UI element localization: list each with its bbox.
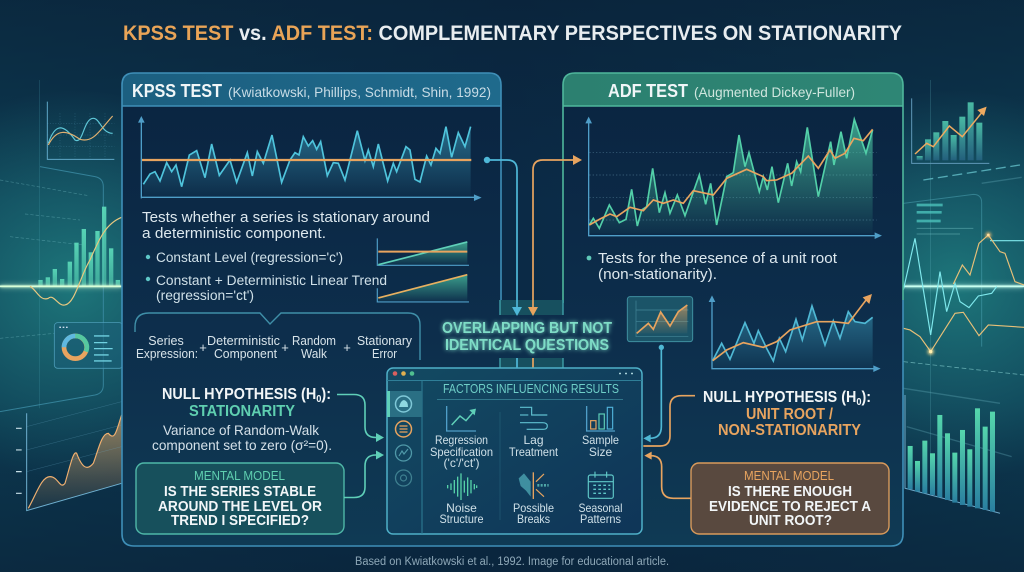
chart: bottom left area chart [16, 402, 122, 511]
ADF header [563, 73, 903, 106]
arrow: ADF mini chart to factors [643, 345, 664, 442]
KPSS mental model box [136, 463, 344, 534]
ADF description: (non-stationarity). [598, 267, 717, 283]
series expression formula: Walk [301, 347, 328, 361]
overlap heading: OVERLAPPING BUT NOT [442, 320, 612, 337]
factor: seasonal patterns: Patterns [580, 512, 621, 526]
panel: factors influencing results [387, 368, 642, 534]
ADF mental model box [691, 463, 889, 534]
right side decorative data charts [903, 80, 1024, 513]
series expression formula: Expression: [136, 347, 198, 361]
line: right orange lines [903, 232, 1024, 355]
connector: KPSS to centre [484, 157, 522, 368]
curve: left orange curve [30, 217, 122, 305]
chart: left bar chart [38, 207, 120, 286]
chart: top left line chart [47, 102, 114, 159]
factor: seasonal patterns [578, 472, 622, 526]
KPSS bullet list: (regression='ct') [156, 288, 254, 303]
series expression formula: Stationary [357, 334, 413, 348]
panel: ADF test [122, 73, 903, 546]
chart: top right bars with arrow [912, 98, 989, 163]
KPSS header: KPSS TEST [132, 81, 222, 101]
glowing baseline right [903, 285, 1024, 287]
KPSS null hypothesis: Variance of Random-Walk [163, 422, 320, 438]
KPSS description: a deterministic component. [142, 225, 326, 242]
ADF mental model box: EVIDENCE TO REJECT A [709, 499, 871, 515]
ADF mini icon chart [627, 297, 693, 342]
factor: regression specification [430, 406, 493, 470]
arrow: ADF null hypothesis to factors [643, 396, 695, 446]
KPSS description: Tests whether a series is stationary around [142, 209, 430, 226]
factor: regression specification: Regression [435, 433, 488, 447]
ADF null hypothesis: 0 [856, 397, 862, 408]
KPSS mental model box: TREND I SPECIFIED? [171, 513, 309, 529]
connector: ADF to centre [528, 155, 582, 368]
ADF description [587, 251, 837, 283]
factor: possible breaks: Possible [513, 501, 554, 515]
KPSS null hypothesis [152, 386, 332, 453]
ADF null hypothesis: NULL HYPOTHESIS (H [703, 389, 869, 406]
KPSS mental model box: AROUND THE LEVEL OR [158, 499, 322, 515]
factor: seasonal patterns: Seasonal [578, 501, 622, 515]
factor: lag treatment: Treatment [509, 445, 559, 459]
left side decorative data charts [0, 80, 123, 511]
ADF header: (Augmented Dickey-Fuller) [694, 84, 855, 100]
ADF mental model box: IS THERE ENOUGH [728, 484, 852, 500]
KPSS header [122, 73, 501, 106]
ADF mental model box: UNIT ROOT? [749, 513, 832, 529]
footer note: Based on Kwiatkowski et al., 1992. Image for educational article. [355, 556, 669, 568]
KPSS description [142, 209, 430, 242]
overlap heading [442, 320, 612, 354]
ADF null hypothesis: ): [861, 389, 871, 406]
main frame [122, 73, 903, 546]
mini chart: constant level [377, 238, 469, 265]
ADF secondary line chart [709, 294, 881, 372]
series expression formula: + [343, 340, 351, 355]
factor: regression specification: ('c'/'ct') [444, 456, 480, 470]
KPSS header: (Kwiatkowski, Phillips, Schmidt, Shin, 1992) [228, 84, 491, 100]
factor: possible breaks [513, 472, 554, 526]
KPSS null hypothesis: component set to zero (σ²=0). [152, 437, 332, 453]
series expression formula [135, 313, 420, 361]
panel: KPSS test [122, 73, 501, 534]
window controls [393, 371, 633, 376]
factor: sample size: Sample [582, 433, 619, 447]
panel: overlapping questions [442, 155, 612, 368]
factor: possible breaks: Breaks [517, 512, 550, 526]
series expression formula: Error [372, 347, 397, 361]
series expression formula: Random [292, 334, 336, 348]
KPSS mental model box: MENTAL MODEL [194, 468, 285, 483]
glowing baseline left [0, 285, 122, 287]
ADF line chart [585, 117, 882, 239]
factor: lag treatment [509, 407, 559, 459]
widget: donut chart card [54, 323, 123, 368]
title: KPSS TEST vs. ADF TEST: COMPLEMENTARY PERSPECTIVES ON STATIONARITY [123, 22, 902, 45]
KPSS null hypothesis: 0 [316, 394, 322, 405]
KPSS bullet list: Constant Level (regression='c') [156, 250, 343, 265]
sidebar icons [387, 391, 422, 486]
arrow: ADF mental model to factors [644, 452, 691, 498]
series expression formula: + [281, 340, 289, 355]
arrow: KPSS null hypothesis to factors [337, 394, 384, 442]
factor: regression specification: Specification [430, 445, 493, 459]
arrow: KPSS mental model to factors [344, 450, 384, 498]
series expression formula: Component [214, 347, 278, 361]
factor: lag treatment: Lag [523, 433, 544, 447]
series expression formula: Series [148, 334, 184, 348]
mini chart: linear trend [377, 275, 469, 302]
KPSS line chart [138, 116, 482, 201]
overlap heading: IDENTICAL QUESTIONS [445, 337, 609, 354]
factor: sample size: Size [589, 445, 612, 459]
KPSS mental model box: IS THE SERIES STABLE [164, 484, 316, 500]
KPSS null hypothesis: NULL HYPOTHESIS (H [162, 386, 328, 403]
line: right cyan spiky line [903, 238, 1024, 335]
ADF null hypothesis [703, 389, 871, 439]
KPSS bullet list: Constant + Deterministic Linear Trend [156, 273, 387, 288]
series expression formula: + [199, 340, 207, 355]
ADF mental model box: MENTAL MODEL [744, 468, 834, 483]
KPSS bullet list [146, 250, 387, 303]
factor: noise structure: Structure [440, 512, 484, 526]
chart: bottom right bars [905, 395, 1000, 513]
series expression formula: Deterministic [207, 334, 280, 348]
KPSS null hypothesis: ): [321, 386, 331, 403]
factor: sample size [582, 406, 619, 459]
factor: noise structure [440, 473, 484, 526]
ADF null hypothesis: NON-STATIONARITY [718, 422, 862, 439]
KPSS null hypothesis: STATIONARITY [189, 403, 296, 420]
factors heading: FACTORS INFLUENCING RESULTS [443, 381, 619, 396]
ADF header: ADF TEST [608, 81, 688, 101]
factor: noise structure: Noise [446, 501, 477, 515]
ADF description: Tests for the presence of a unit root [598, 251, 837, 267]
ADF null hypothesis: UNIT ROOT / [746, 406, 834, 423]
